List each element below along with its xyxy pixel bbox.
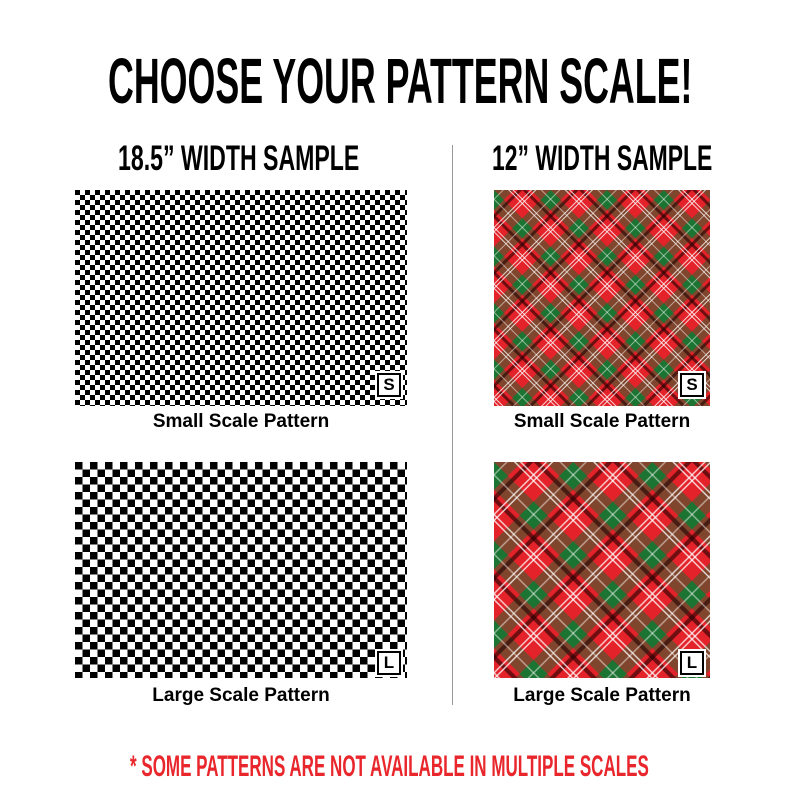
label large right: Large Scale Pattern: [513, 685, 691, 706]
panel: plaid large: [494, 462, 710, 678]
panel: checker small: [75, 190, 407, 406]
badge S: S: [686, 375, 698, 394]
panel: checker large: [75, 462, 407, 678]
badge L: [377, 651, 401, 675]
heading: 18.5 width: 18.5” WIDTH SAMPLE: [118, 139, 359, 178]
badge S: [680, 373, 704, 397]
badge L: L: [687, 653, 697, 672]
divider: [452, 145, 453, 705]
panel: plaid small: [494, 190, 710, 406]
footer note: * SOME PATTERNS ARE NOT AVAILABLE IN MULTIPLE SCALES: [130, 750, 649, 783]
badge S: [377, 373, 401, 397]
label small left: Small Scale Pattern: [153, 411, 329, 432]
label small right: Small Scale Pattern: [514, 411, 690, 432]
badge S: S: [383, 375, 395, 394]
title: CHOOSE YOUR PATTERN SCALE!: [108, 45, 692, 117]
badge L: [680, 651, 704, 675]
badge L: L: [384, 653, 394, 672]
label large left: Large Scale Pattern: [152, 685, 330, 706]
heading: 12 width: 12” WIDTH SAMPLE: [492, 139, 712, 178]
